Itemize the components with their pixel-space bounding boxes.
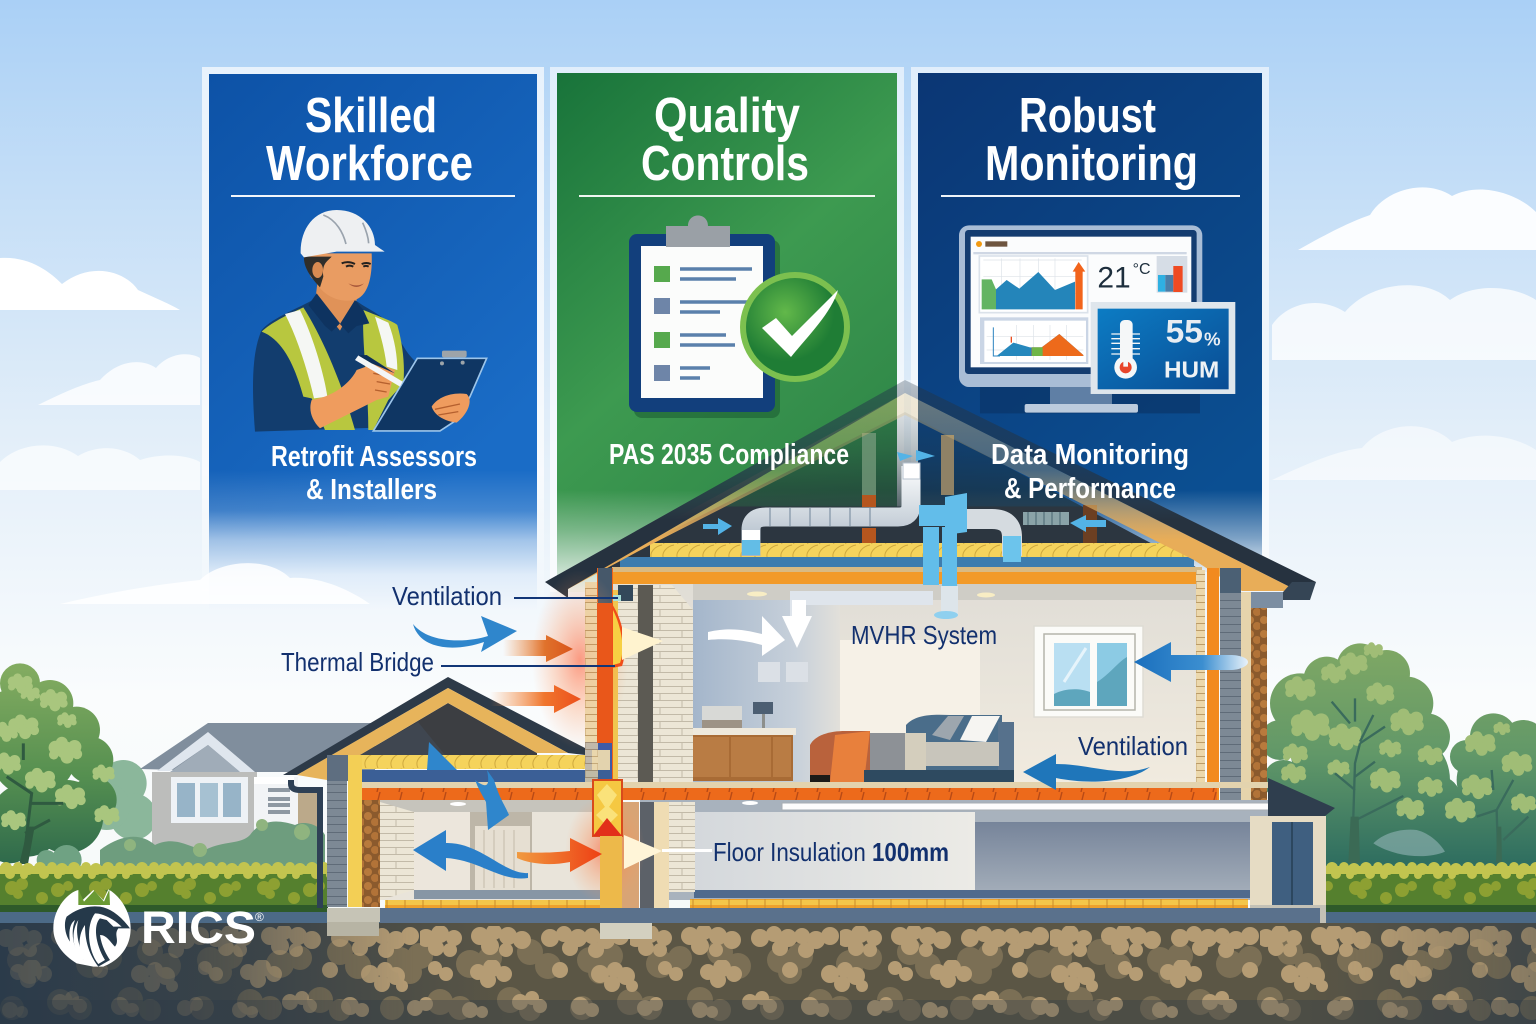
green panel	[557, 73, 897, 592]
kitchen cabinet	[684, 702, 796, 781]
window	[171, 777, 248, 823]
heading: skilled workforce	[266, 89, 473, 191]
thermal bridge upper	[585, 602, 625, 782]
foundation	[327, 908, 1320, 939]
ground with stones	[0, 912, 1536, 1024]
cloud over panel base	[60, 563, 370, 604]
thermal bridge lower block	[593, 780, 622, 908]
window	[1034, 626, 1143, 717]
extension gutter and pipe	[291, 780, 320, 908]
panel frame	[202, 67, 544, 612]
main roof	[545, 380, 1316, 600]
panel: skilled workforce	[60, 67, 544, 612]
house cutaway	[283, 380, 1335, 939]
icon: monitor dashboard: %	[1204, 328, 1221, 349]
roof truss posts	[862, 433, 1097, 544]
arrow: air return lower room	[413, 830, 528, 878]
frame gap over apex	[897, 380, 918, 500]
caption: data monitoring: & Performance	[1004, 473, 1176, 505]
roof	[140, 723, 375, 772]
main house left wall	[585, 568, 693, 782]
main house right wall	[1196, 568, 1283, 802]
extension left wall	[327, 755, 380, 907]
extension attic layers	[355, 755, 610, 782]
arrow: heat lower	[517, 838, 602, 872]
arrow: roof vent	[897, 450, 935, 461]
green panel fade	[557, 490, 897, 592]
icon: clipboard checklist with check badge	[629, 216, 850, 418]
heading: skilled workforce: Skilled	[305, 89, 437, 143]
divider	[941, 195, 1240, 197]
left trees and bushes	[0, 663, 157, 875]
icon: monitor dashboard: °C	[1133, 261, 1151, 278]
icon: monitor dashboard	[959, 225, 1235, 413]
arrow: heat upper	[503, 635, 573, 662]
upper room walls	[612, 584, 1198, 784]
divider	[231, 195, 515, 197]
icon: monitor dashboard: 21	[1097, 261, 1131, 294]
ceiling lights	[747, 592, 995, 598]
arrow: heat pointer upper	[622, 627, 663, 660]
neighbouring house	[100, 723, 375, 866]
clouds	[0, 187, 1536, 490]
arrow: air drop through floor	[475, 770, 509, 830]
caption: retrofit assessors	[271, 441, 477, 506]
arrow: lower ventilation	[1023, 754, 1150, 790]
caption: retrofit assessors: & Installers	[306, 474, 437, 506]
label: MVHR system: MVHR System	[851, 620, 997, 650]
pointer line: floor insulation	[662, 849, 712, 852]
extension room	[380, 800, 758, 908]
right trees	[1260, 642, 1536, 870]
side annex	[1250, 778, 1335, 923]
heading: skilled workforce: Workforce	[266, 137, 473, 191]
divider	[579, 195, 875, 197]
heading: quality controls: Controls	[641, 137, 809, 191]
heading: quality controls: Quality	[654, 89, 800, 143]
panel: quality controls	[550, 67, 904, 592]
caption: data monitoring	[991, 439, 1189, 505]
arrow: duct inlet right	[1070, 515, 1106, 532]
panel: robust monitoring	[911, 67, 1269, 572]
navy panel fade	[918, 490, 1262, 572]
panel frame	[550, 67, 904, 592]
leader line: thermal bridge	[441, 665, 615, 667]
navy panel	[918, 73, 1262, 572]
caption: retrofit assessors: Retrofit Assessors	[271, 441, 477, 473]
arrow: outside ventilation	[413, 616, 517, 652]
mvhr ducts	[742, 463, 1069, 622]
ceiling layers	[612, 557, 1202, 584]
arrow: window air	[1134, 642, 1248, 682]
logo emblem	[53, 889, 131, 967]
label: floor insulation: Floor Insulation 100mm	[713, 837, 949, 867]
basement left wall	[622, 802, 695, 908]
roof insulation	[650, 543, 1188, 557]
wall vents	[758, 662, 808, 682]
arrow: air up into loft	[427, 742, 457, 770]
arrow: heat pointer lower	[624, 835, 662, 869]
heading: quality controls	[641, 89, 809, 191]
basement room	[640, 800, 1270, 908]
gable fill	[170, 745, 240, 772]
leader line: ventilation	[514, 597, 618, 599]
icon: monitor dashboard: HUM	[1164, 356, 1219, 382]
arrow: white supply down	[782, 600, 812, 648]
icon: inspector with clipboard	[253, 210, 487, 432]
arrow: duct inlet left	[703, 518, 732, 535]
caption: PAS 2035 compliance: PAS 2035 Compliance	[609, 439, 849, 471]
label: thermal bridge: Thermal Bridge	[281, 647, 434, 677]
heat glow at thermal bridges	[532, 570, 645, 905]
intermediate floor	[355, 782, 1275, 800]
left blue room	[693, 584, 840, 782]
heading: robust monitoring: Robust	[1019, 89, 1156, 143]
label: ventilation outside: Ventilation	[392, 581, 502, 611]
caption: data monitoring: Data Monitoring	[991, 439, 1189, 471]
gable trim	[157, 732, 255, 772]
blue panel fade	[209, 470, 537, 610]
blue panel	[209, 74, 537, 610]
label: ventilation inside: Ventilation	[1078, 731, 1188, 761]
logo wordmark: RICS	[141, 902, 256, 953]
RICS logo	[53, 889, 264, 967]
arrow: white supply horizontal	[708, 616, 785, 656]
house body	[152, 772, 257, 854]
arrow: heat middle	[490, 685, 581, 713]
registered mark: ®	[255, 910, 264, 924]
sofa	[810, 715, 1014, 782]
hedges	[0, 862, 1536, 912]
icon: monitor dashboard: 55	[1166, 314, 1203, 350]
heading: robust monitoring	[985, 89, 1198, 191]
heading: robust monitoring: Monitoring	[985, 137, 1198, 191]
garden bushes	[100, 821, 325, 866]
panel frame	[911, 67, 1269, 572]
side wing with vents	[254, 777, 320, 840]
floor white strip	[782, 803, 1274, 810]
main attic space	[590, 412, 1205, 572]
extension roof	[283, 677, 585, 780]
